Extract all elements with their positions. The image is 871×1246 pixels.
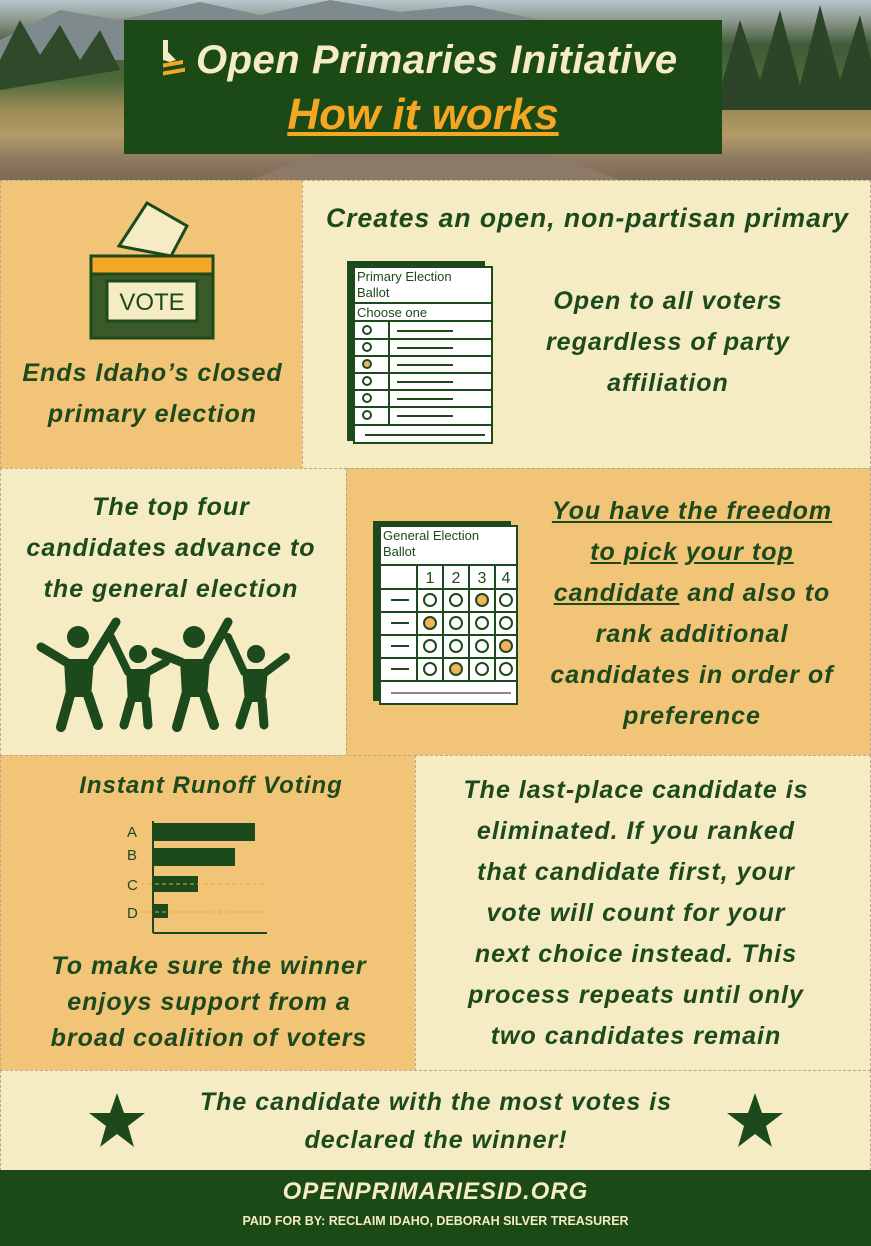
heading: Instant Runoff Voting — [79, 772, 343, 799]
panel: ranking — [346, 468, 871, 756]
bar chart: A — [127, 824, 137, 841]
text: candidates in order of — [550, 661, 834, 689]
paid for: PAID FOR BY: RECLAIM IDAHO, DEBORAH SILVER TREASURER — [242, 1214, 629, 1228]
text: eliminated. If you ranked — [477, 817, 795, 845]
icon: ballot box — [90, 201, 214, 340]
subtitle: How it works — [287, 90, 559, 139]
bar chart — [127, 821, 267, 934]
text: vote will count for your — [486, 899, 786, 927]
bar chart: B — [127, 847, 137, 864]
text — [22, 359, 283, 428]
bar chart: C — [127, 877, 138, 894]
panel: winner — [0, 1070, 871, 1171]
header photo background — [0, 0, 871, 180]
text: primary election — [48, 400, 257, 428]
text: preference — [623, 702, 761, 730]
text: rank additional — [596, 620, 788, 648]
panel: elimination — [415, 755, 871, 1071]
bar chart: D — [127, 905, 138, 922]
icon: primary ballot: Choose one — [357, 305, 427, 320]
title box — [124, 20, 722, 154]
text: the general election — [44, 575, 298, 603]
text: to pick your top — [590, 538, 794, 566]
icon: primary ballot: Primary Election — [357, 269, 452, 284]
text — [26, 493, 316, 603]
icon: general ballot: General Election — [383, 528, 479, 543]
text: Ends Idaho’s closed — [22, 359, 283, 387]
icon: people — [36, 618, 290, 732]
icon: primary ballot — [347, 261, 493, 444]
icon: general ballot: 1 — [426, 570, 435, 587]
text: affiliation — [607, 369, 729, 397]
icon: general ballot: 4 — [502, 570, 511, 587]
text — [463, 776, 809, 1050]
title: Open Primaries Initiative — [196, 38, 678, 82]
text: The top four — [92, 493, 250, 521]
panel: instant runoff — [0, 755, 416, 1071]
icon: star right — [727, 1093, 783, 1147]
text — [550, 497, 835, 730]
text: candidates advance to — [26, 534, 316, 562]
text: regardless of party — [546, 328, 790, 356]
icon: idaho logo — [163, 40, 185, 76]
text: The last-place candidate is — [463, 776, 809, 804]
icon: star left — [89, 1093, 145, 1147]
text: broad coalition of voters — [51, 1024, 367, 1052]
text: next choice instead. This — [475, 940, 797, 968]
text: You have the freedom — [552, 497, 832, 525]
icon: primary ballot: Ballot — [357, 285, 390, 300]
text: that candidate first, your — [477, 858, 795, 886]
icon: general ballot — [373, 521, 518, 705]
heading: Creates an open, non-partisan primary — [326, 203, 849, 233]
panel: top four — [0, 468, 347, 756]
icon: general ballot: Ballot — [383, 544, 416, 559]
text: Open to all voters — [553, 287, 783, 315]
text: To make sure the winner — [51, 952, 367, 980]
text — [546, 287, 790, 397]
footer — [0, 1170, 871, 1246]
text — [51, 952, 367, 1052]
text — [200, 1088, 672, 1154]
icon: general ballot: 2 — [452, 570, 461, 587]
icon: general ballot: 3 — [478, 570, 487, 587]
icon: ballot box: VOTE — [119, 289, 185, 316]
text: declared the winner! — [304, 1126, 568, 1154]
text: process repeats until only — [468, 981, 804, 1009]
text: candidate and also to — [554, 579, 830, 607]
text: enjoys support from a — [67, 988, 351, 1016]
panel: closed primary — [0, 180, 303, 469]
url: OPENPRIMARIESID.ORG — [283, 1178, 588, 1205]
text: The candidate with the most votes is — [200, 1088, 672, 1116]
panel: open primary — [302, 180, 871, 469]
text: two candidates remain — [491, 1022, 781, 1050]
